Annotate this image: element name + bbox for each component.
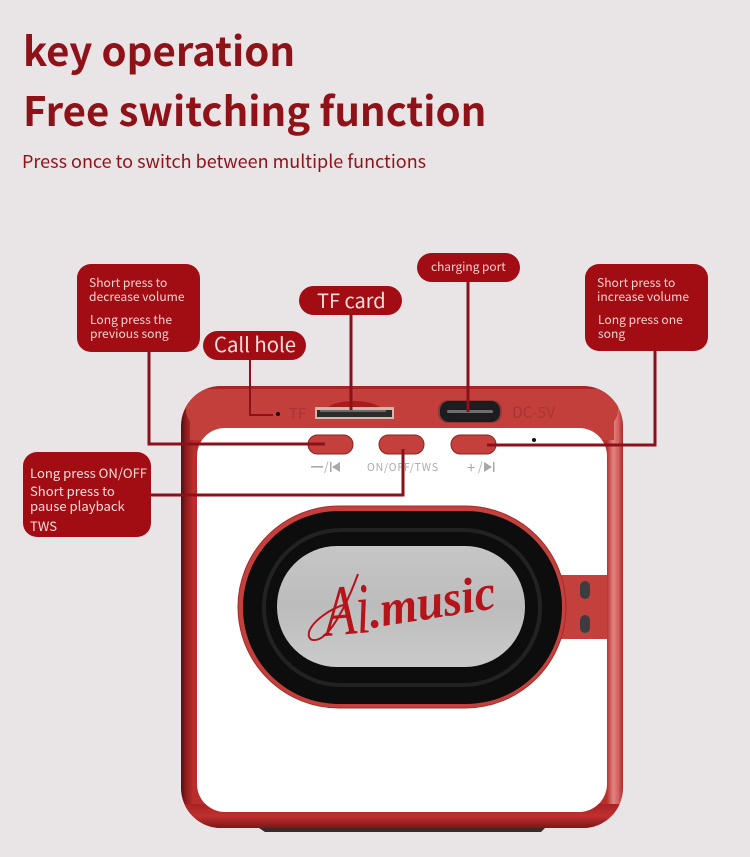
callout: on off: pause playback: [30, 496, 126, 515]
callout: increase volume: increase volume: [597, 288, 689, 305]
callout: increase volume: Short press to: [597, 274, 675, 291]
callout: decrease volume: [77, 264, 200, 352]
button label: minus: /: [324, 458, 329, 475]
button: minus: [308, 435, 353, 454]
title: Free switching function: [23, 79, 486, 138]
TF label: TF: [289, 403, 306, 424]
callout: on off: TWS: [30, 516, 57, 535]
callout: TF card: TF card: [317, 285, 386, 314]
button label: plus: +: [467, 457, 475, 478]
callout: on off: [23, 452, 151, 537]
callout: decrease volume: Short press to: [89, 274, 167, 291]
title: key operation: [23, 19, 295, 78]
callout: increase volume: Long press one: [598, 311, 683, 328]
logo: [309, 564, 499, 652]
button: plus: [451, 435, 496, 454]
call hole dot: [276, 412, 280, 416]
device frame: [181, 386, 623, 828]
callout: charging port: charging port: [431, 258, 506, 275]
callout: on off: Long press ON/OFF: [30, 463, 147, 482]
button label: minus: [311, 458, 340, 475]
white front panel: [197, 428, 607, 812]
callout: TF card: [299, 285, 402, 315]
callout: decrease volume: Long press the: [90, 311, 172, 328]
button: on off: [379, 435, 424, 454]
device base: [259, 828, 545, 832]
speaker device: [181, 386, 623, 832]
button label: plus: [467, 457, 494, 478]
callout: decrease volume: previous song: [90, 325, 169, 342]
speaker: [238, 506, 607, 708]
logo: Ai: [318, 568, 373, 652]
callout: on off: Short press to: [30, 481, 115, 500]
connector lines: [149, 282, 655, 495]
speaker rim: [238, 506, 566, 708]
button label: on off tws: ON/OFF/TWS: [367, 460, 439, 475]
speaker black surround: [243, 511, 562, 704]
logo: .music: [364, 564, 499, 639]
DC-5V label: DC-5V: [512, 401, 555, 423]
TF slot: [315, 401, 394, 419]
subtitle: Press once to switch between multiple functions: [22, 148, 426, 174]
metal grille: [277, 546, 525, 667]
callout: increase volume: [585, 264, 708, 351]
callout: increase volume: song: [598, 325, 625, 342]
title: [23, 19, 486, 138]
callout: decrease volume: decrease volume: [89, 288, 185, 305]
callout: call hole: Call hole: [214, 328, 296, 358]
USB-C port: [438, 400, 502, 423]
side tab: [555, 575, 607, 639]
button label: plus: /: [478, 458, 483, 475]
tab holes: [580, 581, 590, 633]
callout: charging port: [417, 253, 520, 282]
stray dot: [532, 438, 536, 442]
